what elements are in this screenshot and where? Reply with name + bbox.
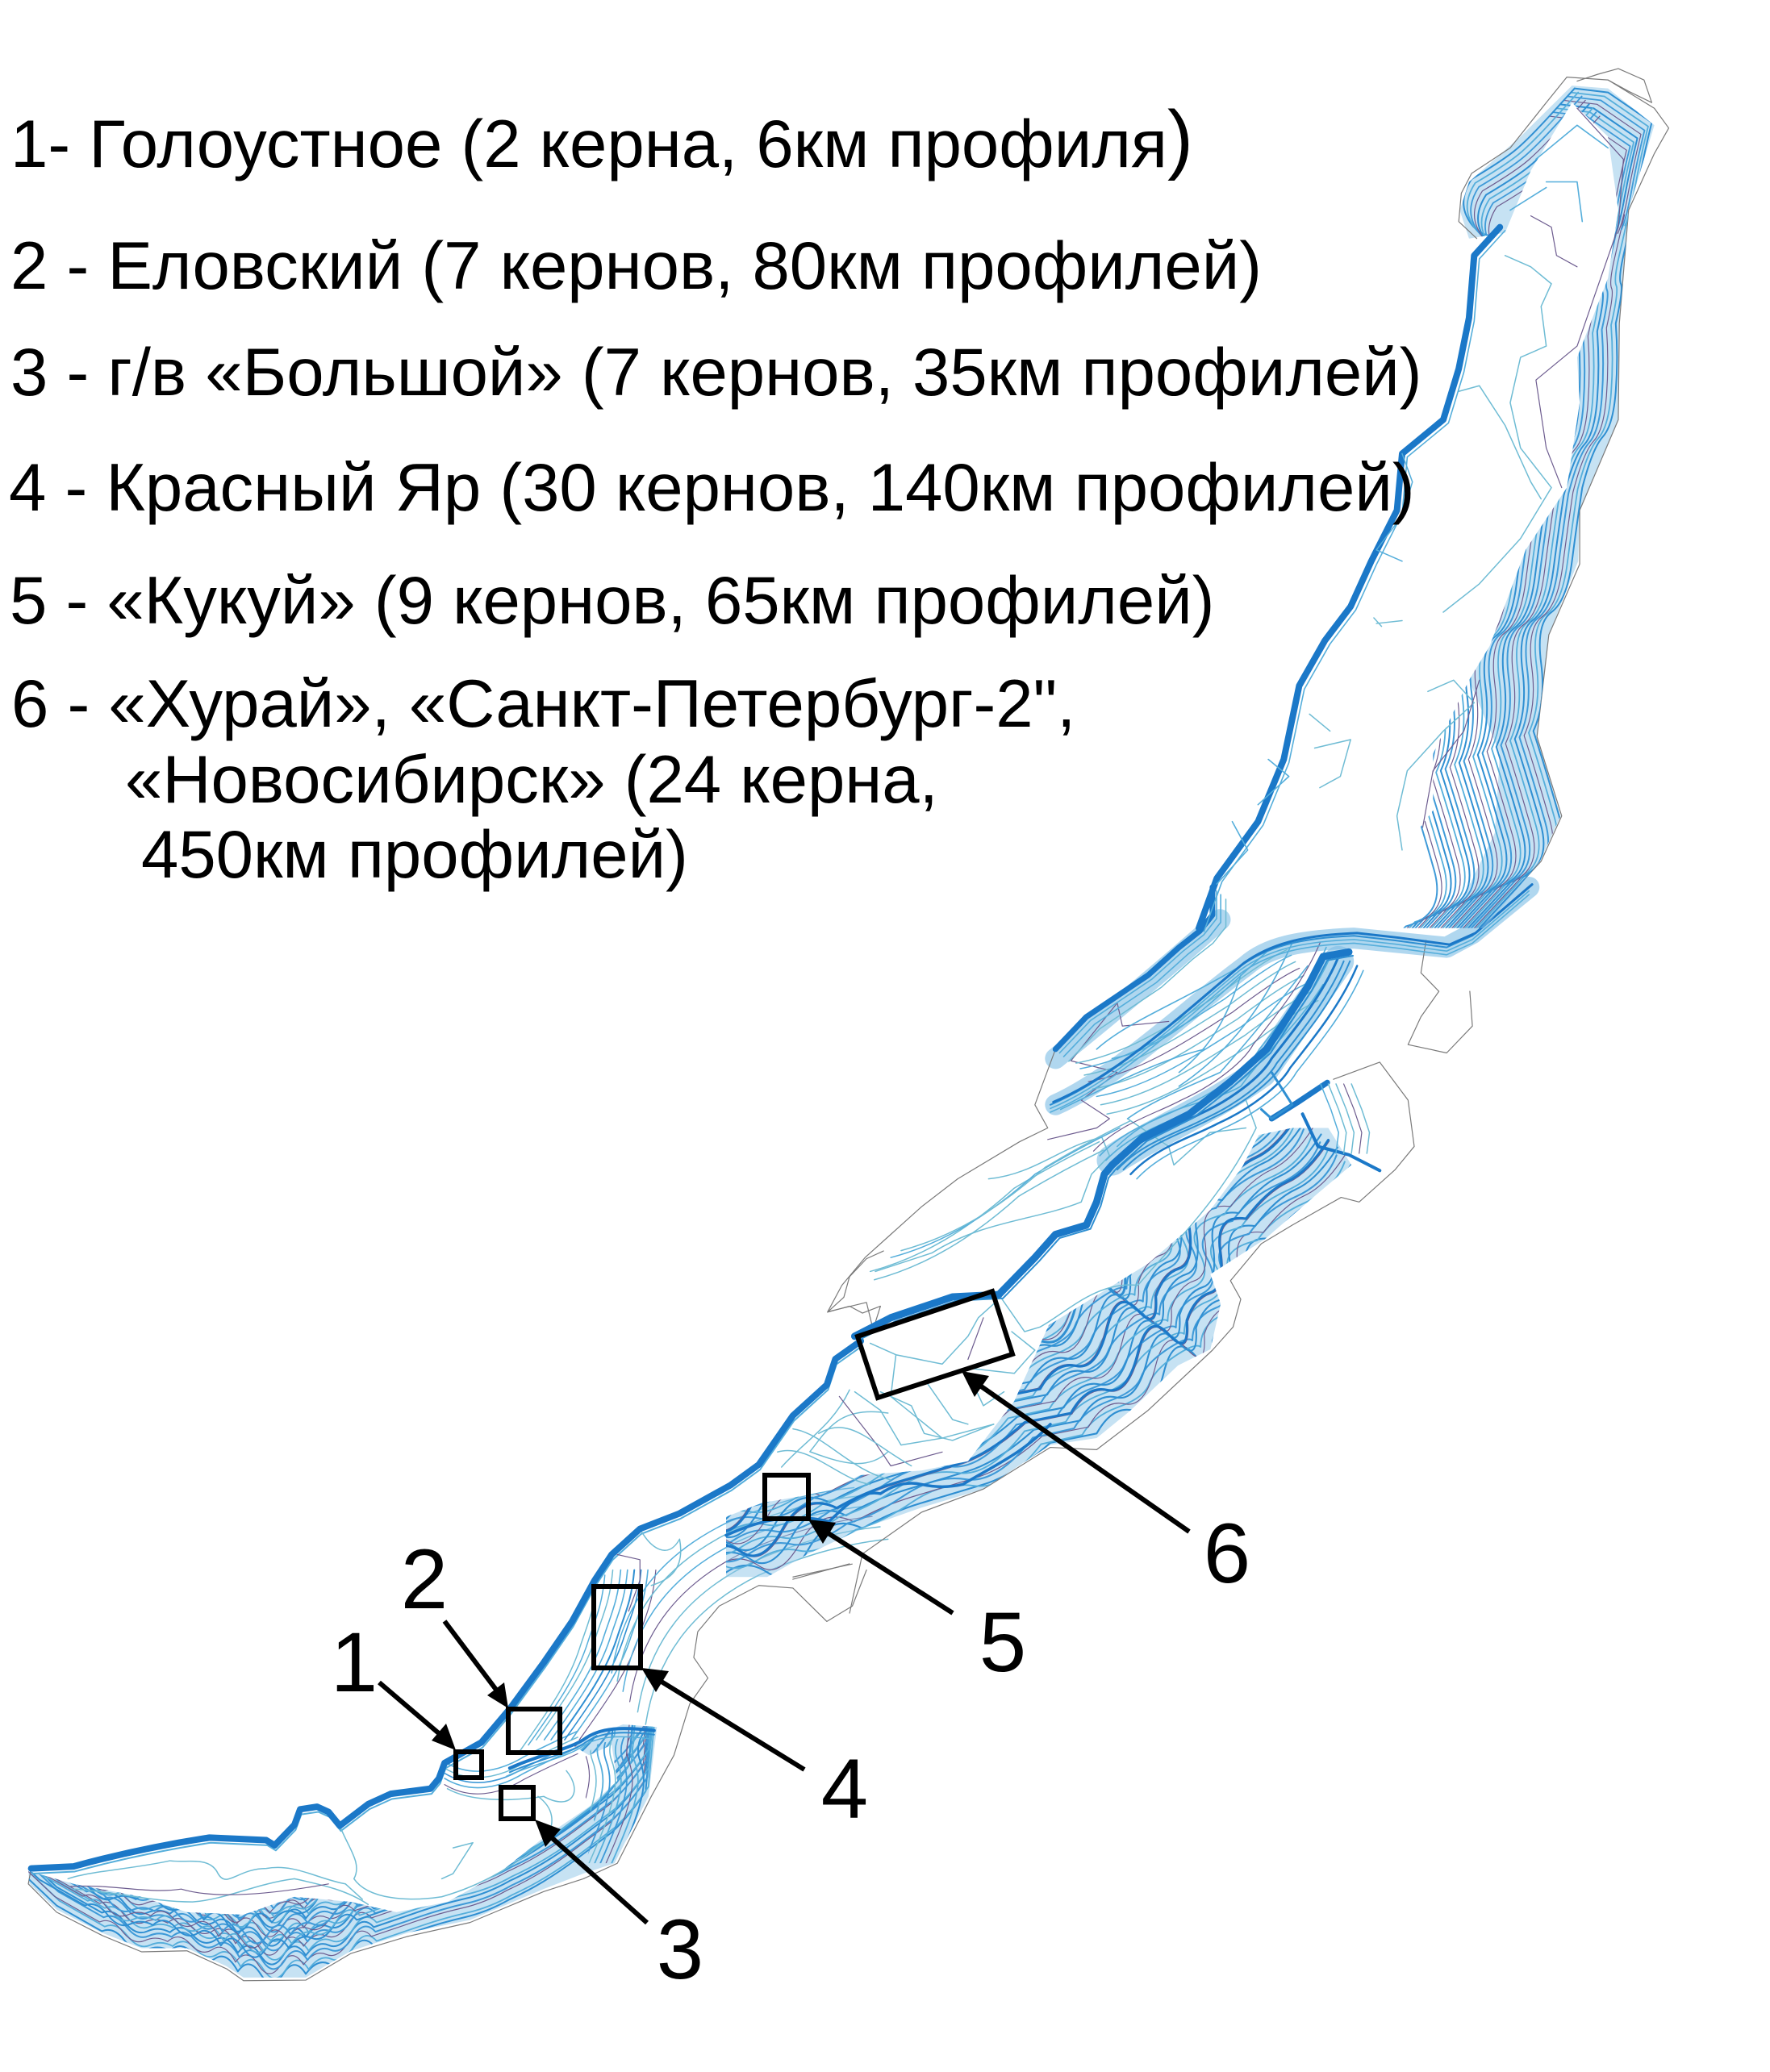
legend line 5: 5 - «Кукуй» (9 кернов, 65км профилей) (10, 563, 1215, 638)
northern basin contours (1199, 69, 1668, 982)
legend line 2: 2 - Еловский (7 кернов, 80км профилей) (10, 228, 1262, 303)
legend line 3: 3 - г/в «Большой» (7 кернов, 35км профилей) (10, 335, 1422, 410)
legend line 6: «Новосибирск» (24 керна, (125, 742, 938, 817)
southern basin contours (0, 1251, 888, 1983)
legend line 4: 4 - Красный Яр (30 кернов, 140км профилей) (9, 450, 1415, 525)
legend line 1: 1- Голоустное (2 керна, 6км профиля (10, 106, 1167, 181)
study area frame 1 (456, 1752, 482, 1778)
map number 3: 3 (657, 1903, 703, 1997)
arrow 5 (808, 1520, 953, 1613)
legend line 6: 6 - «Хурай», «Санкт-Петербург-2", (11, 666, 1075, 741)
middle basin contours (582, 885, 1532, 1613)
study area frame 4 (594, 1586, 641, 1668)
study area frame 6 (858, 1291, 1012, 1398)
legend line 6 (11, 666, 1075, 892)
map number 2: 2 (401, 1532, 448, 1627)
Selenga shoal cluster contours (586, 1732, 645, 1863)
study area frame 2 (508, 1709, 560, 1753)
study area frame 5 (765, 1475, 808, 1519)
arrow 3 (535, 1820, 647, 1923)
arrow 2 (445, 1621, 508, 1708)
map number 4: 4 (821, 1742, 868, 1836)
legend line 1: ) (1167, 95, 1193, 181)
map number 6: 6 (1204, 1507, 1250, 1601)
arrow 4 (641, 1668, 804, 1770)
arrow 1 (379, 1682, 456, 1750)
legend line 6: 450км профилей) (141, 817, 688, 892)
map number 5: 5 (979, 1595, 1026, 1690)
arrow 6 (962, 1371, 1189, 1532)
study area frame 3 (501, 1787, 533, 1819)
map number 1: 1 (331, 1615, 378, 1710)
